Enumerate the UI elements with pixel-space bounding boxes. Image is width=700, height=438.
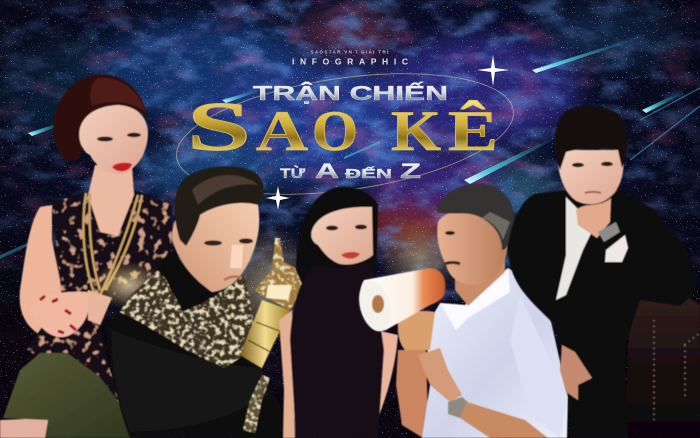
black hair	[296, 187, 378, 335]
heading line 1: TRẬN CHIẾN	[253, 81, 448, 105]
leather chair	[625, 290, 700, 438]
heading main: sao kê: K	[391, 100, 441, 163]
face	[79, 105, 148, 174]
title block	[187, 48, 498, 183]
heading main: sao kê	[187, 89, 498, 166]
hands	[398, 311, 435, 350]
infographic label: INFOGRAPHIC	[292, 56, 408, 66]
glow behind gold gauntlet	[216, 223, 320, 347]
neck	[455, 258, 505, 306]
neck and chest	[88, 165, 134, 236]
bare arms	[279, 310, 295, 438]
olive skirt	[3, 353, 138, 438]
gold embellished collar	[120, 268, 258, 368]
person: woman in floral dress, left	[0, 74, 172, 438]
face	[311, 207, 373, 265]
heading main: sao kê: O	[312, 100, 358, 163]
warm glow	[378, 216, 462, 300]
person: woman in black turtleneck, centre	[279, 187, 398, 438]
megaphone	[354, 268, 445, 335]
sparkle stars	[266, 55, 509, 210]
person: man with megaphone	[354, 184, 568, 438]
forearm	[396, 350, 428, 438]
face	[558, 150, 624, 204]
hands with red nails	[30, 292, 89, 337]
heading main: sao kê: A	[256, 100, 308, 163]
gold trim down jacket	[243, 375, 270, 433]
grey hair	[437, 184, 514, 250]
face	[437, 211, 508, 285]
heading line 3: TỪ	[280, 164, 305, 181]
heading line 3: A	[315, 160, 339, 183]
hair	[53, 74, 148, 161]
heading main: sao kê: Ê	[448, 100, 498, 163]
heading line 3: Z	[400, 160, 421, 183]
left hand at hip	[560, 345, 592, 400]
meteors	[0, 36, 700, 259]
high collar	[157, 250, 212, 305]
person: man in black suit	[508, 106, 700, 438]
lower leg skin	[0, 418, 50, 438]
turtleneck	[290, 262, 384, 438]
heading line 3	[280, 160, 421, 183]
black suit	[508, 190, 697, 438]
white shirt	[422, 268, 568, 438]
black jacket	[107, 270, 293, 438]
neck and face	[172, 196, 259, 292]
heading line 3: ĐẾN	[345, 166, 392, 181]
white shirt	[556, 197, 600, 300]
quiff hair	[175, 166, 264, 246]
gold gauntlet	[240, 238, 306, 368]
orbit ring	[169, 55, 521, 213]
glow on shoulder	[92, 261, 164, 309]
floral dress	[25, 190, 172, 420]
person: man in black and gold, centre left	[107, 166, 306, 438]
publisher line: SAOSTAR.VN / GIẢI TRÍ	[310, 48, 390, 54]
hair	[555, 106, 627, 170]
hand on chin with watch and cuff	[576, 198, 611, 238]
heading main: sao kê: S	[187, 89, 251, 166]
gold necklace	[83, 193, 142, 295]
watch	[448, 397, 468, 418]
lower arm	[460, 402, 548, 438]
arm and shoulder	[20, 205, 88, 340]
